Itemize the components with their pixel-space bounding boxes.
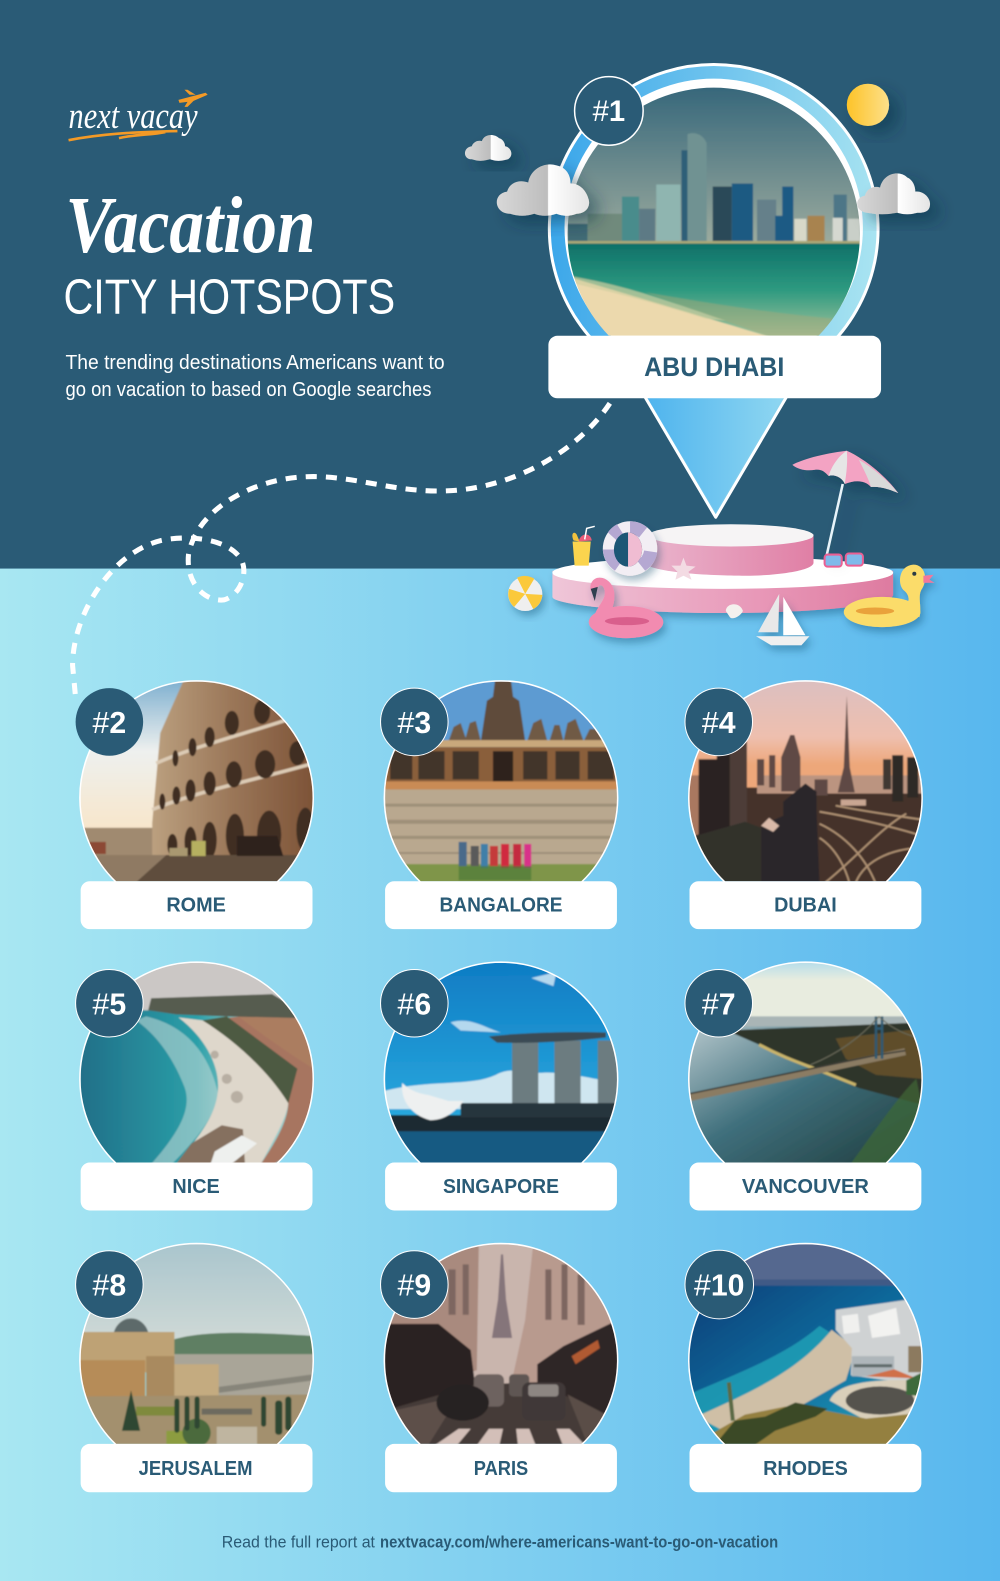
- rank badge #7: [685, 969, 753, 1037]
- shell: [726, 604, 743, 618]
- city label: Singapore: [385, 1163, 617, 1210]
- rank badge #7: #7: [702, 988, 736, 1021]
- city label: Abu Dhabi: [548, 336, 881, 398]
- city card: #6 Singapore: [381, 962, 618, 1210]
- starfish: [671, 558, 696, 580]
- city label: Jerusalem: JERUSALEM: [139, 1458, 253, 1480]
- beach ball: [508, 576, 542, 611]
- illustration: podium with beach toys: [508, 451, 934, 645]
- city label: Dubai: [690, 881, 921, 929]
- city card: #5 Nice: [76, 962, 314, 1210]
- photo: Dubai skyline: [689, 681, 922, 884]
- rank badge #6: [381, 969, 448, 1037]
- parasol: [792, 451, 898, 556]
- city label: Bangalore: BANGALORE: [440, 894, 563, 916]
- city label: Vancouver: [690, 1163, 921, 1210]
- city label: Paris: PARIS: [474, 1458, 528, 1480]
- city label: Nice: [81, 1163, 312, 1210]
- drink cup: [572, 526, 595, 566]
- sailboat: [756, 594, 809, 645]
- photo: Colosseum: [80, 681, 315, 882]
- city label: Vancouver: VANCOUVER: [742, 1176, 869, 1198]
- subtitle: go on vacation to based on Google searches: [66, 378, 431, 401]
- title: Vacation: Vacation: [66, 181, 316, 270]
- photo: Old City walls: [80, 1243, 314, 1447]
- city label: Paris: [385, 1444, 617, 1492]
- photo: temple and steps: [384, 681, 618, 884]
- background: dark navy top: [0, 0, 1000, 569]
- city card: #4 Dubai: [685, 681, 922, 929]
- rank badge #10: [685, 1250, 754, 1319]
- rank badge #9: #9: [397, 1270, 431, 1303]
- rank badge #1: [575, 77, 643, 145]
- city label: Rome: [81, 881, 312, 929]
- duck float: [844, 565, 934, 627]
- photo: Abu Dhabi skyline: [564, 78, 863, 336]
- rank badge #10: #10: [694, 1270, 744, 1303]
- sunglasses: [825, 554, 863, 567]
- photo: Marina Bay: [384, 962, 618, 1166]
- icon: medium cloud: [497, 164, 589, 216]
- rank badge #9: [381, 1251, 448, 1318]
- city label: Dubai: DUBAI: [774, 894, 837, 916]
- swim ring: [603, 521, 657, 576]
- city card: #7 Vancouver: [683, 962, 927, 1210]
- background: light blue gradient bottom: [0, 569, 1000, 1581]
- photo: Nice beach: [80, 962, 314, 1176]
- photo: Rhodes coast: [689, 1243, 922, 1447]
- icon: right cloud: [857, 173, 930, 214]
- footer text: Read the full report at: [222, 1533, 375, 1552]
- rank badge #5: [76, 969, 143, 1037]
- rank badge #2: #2: [93, 707, 126, 740]
- city label: Singapore: SINGAPORE: [443, 1176, 559, 1198]
- city card: #9 Paris: [381, 1243, 618, 1492]
- flamingo float: [589, 578, 663, 638]
- rank badge #4: [685, 688, 753, 756]
- photo: Paris street: [384, 1243, 618, 1447]
- city label: Rhodes: RHODES: [763, 1458, 848, 1480]
- city card: #10 Rhodes: [685, 1243, 922, 1492]
- pin body ring: [549, 65, 878, 517]
- city card: #2 Rome: [76, 681, 315, 929]
- dashed flight path: [73, 403, 610, 698]
- rank badge #4: #4: [702, 707, 736, 740]
- lower podium: [552, 557, 893, 613]
- map pin: Abu Dhabi: [548, 65, 881, 517]
- pin tip fill: [647, 397, 782, 512]
- icon: small cloud: [465, 135, 511, 161]
- photo: Lions Gate Bridge: [683, 962, 927, 1168]
- rank badge #6: #6: [397, 988, 431, 1021]
- rank badge #2: [76, 688, 143, 756]
- rank badge #8: #8: [93, 1270, 126, 1303]
- icon: sun: [847, 84, 889, 126]
- logo: next vacay: next vacay: [69, 96, 198, 137]
- rank badge #1: #1: [593, 96, 625, 128]
- rank badge #8: [76, 1251, 143, 1318]
- subtitle: The trending destinations Americans want to: [66, 351, 445, 374]
- city label: Rome: ROME: [166, 894, 226, 916]
- city label: Abu Dhabi: ABU DHABI: [644, 351, 784, 382]
- city label: Nice: NICE: [172, 1176, 220, 1198]
- rank badge #5: #5: [93, 988, 126, 1021]
- city label: Jerusalem: [81, 1444, 312, 1492]
- city label: Bangalore: [385, 881, 617, 929]
- city label: Rhodes: [690, 1444, 921, 1492]
- footer text: nextvacay.com/where-americans-want-to-go-on-vacation: [380, 1533, 778, 1552]
- upper podium: [645, 524, 814, 576]
- rank badge #3: #3: [397, 707, 431, 740]
- city card: #3 Bangalore: [381, 681, 618, 929]
- title: City Hotspots: CITY HOTSPOTS: [64, 270, 395, 325]
- city card: #8 Jerusalem: [76, 1243, 314, 1492]
- rank badge #3: [381, 688, 448, 756]
